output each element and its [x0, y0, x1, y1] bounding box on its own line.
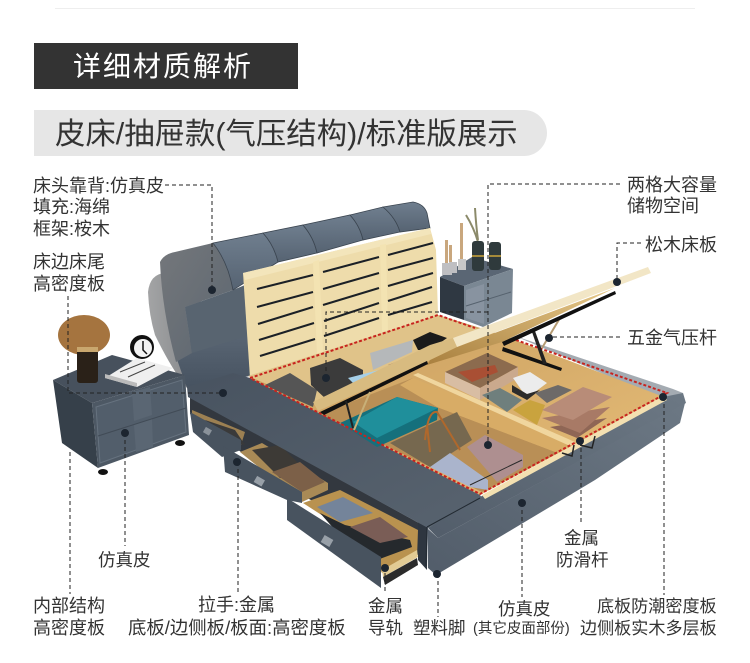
label: storage: 储物空间: [627, 196, 699, 216]
label: leather: [473, 599, 570, 637]
red dashed edge: [250, 315, 475, 378]
label: rail: [368, 596, 403, 638]
label: bed edge: 床边床尾: [33, 252, 105, 272]
label: storage: 两格大容量: [627, 175, 717, 195]
label: gas strut: 五金气压杆: [627, 328, 717, 348]
subheading pill: 皮床/抽屉款(气压结构)/标准版展示: [55, 117, 518, 151]
label: rail: 金属: [368, 596, 403, 616]
label: board materials: 底板防潮密度板: [597, 597, 717, 616]
subheading pill: [34, 110, 547, 156]
heading banner: 详细材质解析: [73, 51, 253, 82]
label: internal structure: 内部结构: [33, 596, 105, 616]
lifted lid and gas struts: [313, 267, 651, 430]
label: headboard: 填充:海绵: [33, 197, 110, 217]
left nightstand: [53, 355, 189, 475]
leader lines: [68, 184, 664, 617]
right nightstand: [440, 257, 513, 327]
lamp: [58, 315, 110, 383]
books: [105, 358, 173, 387]
label: handle: 底板/边侧板/板面:高密度板: [128, 617, 346, 638]
label: storage: [627, 175, 717, 216]
label: leather: 仿真皮: [498, 599, 550, 619]
label: anti-slip bar: 防滑杆: [556, 550, 608, 570]
label: internal structure: 高密度板: [33, 618, 105, 638]
label: nightstand leather: 仿真皮: [98, 550, 150, 570]
label: handle: [128, 595, 346, 638]
label: headboard: [33, 176, 164, 239]
label: handle: 拉手:金属: [198, 595, 275, 615]
red dashed edge right: [250, 340, 667, 494]
heading banner: [34, 43, 298, 89]
label: plastic foot: 塑料脚: [413, 618, 466, 638]
anti-slip brackets: [562, 436, 595, 456]
storage compartments: [248, 315, 667, 499]
callout dots: [121, 278, 667, 578]
clock: [130, 335, 154, 359]
label: anti-slip bar: 金属: [564, 528, 599, 548]
clothes and items in the rear compartment: [265, 332, 447, 407]
label: board materials: [580, 597, 717, 638]
box and clothes in right compartment: [445, 353, 612, 438]
label: bed edge: [33, 252, 105, 294]
vases and candles: [442, 208, 501, 275]
label: anti-slip bar: [556, 528, 608, 570]
clothes in left compartment: [340, 397, 523, 490]
label: headboard: 框架:桉木: [33, 219, 110, 239]
slatted headboard panel: [243, 228, 438, 378]
bed frame: [187, 315, 686, 575]
label: bed edge: 高密度板: [33, 274, 105, 294]
label: board materials: 边侧板实木多层板: [580, 619, 717, 638]
label: internal structure: [33, 596, 105, 638]
bed illustration: [53, 202, 686, 588]
label: pine slats: 松木床板: [645, 235, 717, 255]
drawers: [190, 397, 428, 588]
top hairline: [55, 8, 695, 10]
label: headboard: 床头靠背:仿真皮: [33, 176, 164, 196]
label: leather: (其它皮面部份): [473, 619, 570, 637]
label: rail: 导轨: [368, 618, 403, 638]
headboard: [148, 202, 430, 388]
